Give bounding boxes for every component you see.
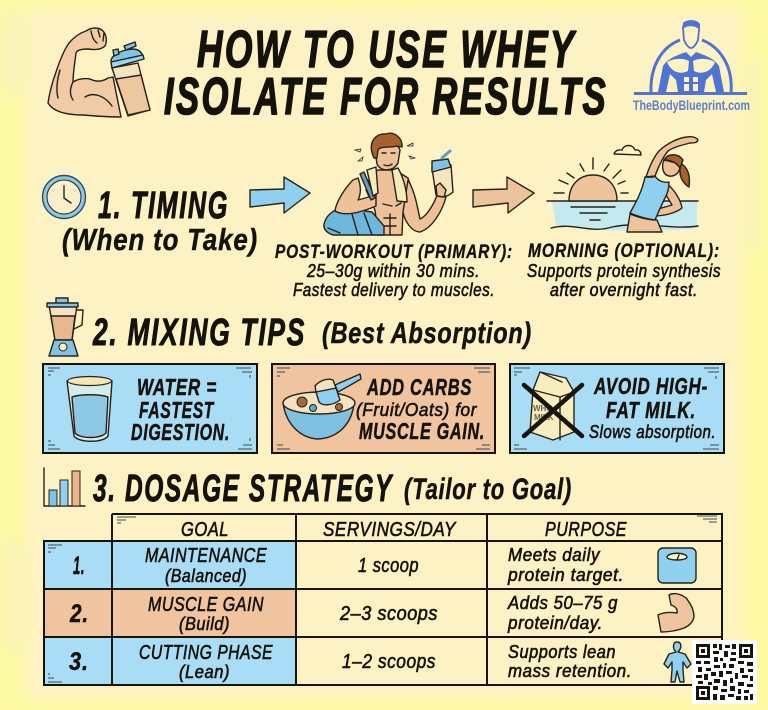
text block: post-workout — [275, 242, 513, 300]
row 3: cutting phase: (Lean) — [179, 662, 230, 682]
icon: bar chart — [44, 468, 85, 506]
panel: add carbs: (Fruit/Oats) for — [356, 400, 477, 420]
title: HOW TO USE WHEY — [197, 21, 577, 79]
icon: clock — [42, 176, 86, 218]
panel: add carbs: MUSCLE GAIN. — [359, 418, 485, 444]
QR code — [692, 640, 757, 704]
panel: water: WATER = — [137, 374, 217, 400]
title — [164, 21, 608, 126]
section 2 heading: mixing tips: (Best Absorption) — [322, 317, 532, 350]
dosage table — [44, 514, 722, 685]
text block: post-workout: 25–30g within 30 mins. — [306, 261, 480, 281]
row 2: muscle gain: Adds 50–75 g — [507, 593, 618, 613]
text block: morning: Supports protein synthesis — [527, 261, 721, 281]
row 3: cutting phase: 1–2 scoops — [342, 651, 436, 673]
row 2: muscle gain: 2–3 scoops — [339, 603, 438, 625]
panel: avoid milk: FAT MILK. — [606, 397, 696, 423]
text block: post-workout: Fastest delivery to muscles. — [293, 280, 495, 300]
table header: SERVINGS/DAY — [323, 519, 457, 541]
row 2: muscle gain: protein/day. — [507, 613, 603, 633]
row 1: maintenance: Meets daily — [508, 545, 600, 565]
text block: post-workout: POST-WORKOUT (PRIMARY): — [275, 242, 513, 263]
table header: GOAL — [181, 519, 229, 541]
arrow: blue — [250, 177, 310, 213]
icon: oats bowl with scoop — [283, 374, 361, 439]
section 1 heading: timing: (When to Take) — [62, 222, 258, 257]
panel: avoid milk: Slows absorption. — [589, 422, 716, 442]
row 1: maintenance: (Balanced) — [165, 566, 247, 586]
panel: water — [43, 364, 257, 453]
row 3: cutting phase: mass retention. — [508, 661, 632, 681]
icon: crossed-out milk carton — [524, 372, 582, 440]
row 2: muscle gain: (Build) — [179, 614, 230, 634]
icon: flexed bicep — [48, 28, 121, 117]
section 3 heading: dosage strategy: 3. DOSAGE STRATEGY — [93, 468, 394, 510]
table header: PURPOSE — [545, 519, 627, 541]
row 3: cutting phase: CUTTING PHASE — [139, 642, 273, 664]
illustration: post-workout man — [324, 133, 453, 235]
row 1: maintenance: 1. — [73, 552, 85, 580]
row 1: maintenance: protein target. — [507, 565, 624, 585]
row 2: muscle gain: 2. — [69, 600, 89, 628]
section 1 heading: timing: 1. TIMING — [98, 185, 229, 227]
text block: morning: MORNING (OPTIONAL): — [528, 241, 720, 262]
icon: crossed-out milk carton: WHO — [533, 404, 553, 413]
panel: water: DIGESTION. — [131, 419, 230, 445]
icon: scale — [658, 548, 696, 583]
section 2 heading: mixing tips — [47, 298, 532, 356]
panel: add carbs: ADD CARBS — [366, 374, 472, 400]
icon: small bicep — [658, 594, 694, 632]
icon: crossed-out milk carton: MILK — [534, 413, 554, 422]
row 1: maintenance: 1 scoop — [358, 555, 419, 577]
table header — [181, 519, 627, 541]
panel: water: FASTEST — [139, 397, 215, 423]
row 1: maintenance: MAINTENANCE — [145, 545, 267, 567]
row 2: muscle gain: MUSCLE GAIN — [148, 594, 264, 616]
text block: morning: after overnight fast. — [550, 280, 698, 300]
row 3: cutting phase: Supports lean — [508, 642, 616, 662]
row 1: maintenance — [73, 545, 696, 586]
text block: morning — [527, 241, 721, 300]
panel: avoid milk: AVOID HIGH- — [593, 373, 708, 399]
row 2: muscle gain — [69, 593, 694, 634]
section 3 heading: dosage strategy: (Tailor to Goal) — [404, 473, 572, 506]
table cell fills — [44, 541, 296, 685]
section 1 heading: timing — [42, 176, 258, 257]
icon: blender — [47, 298, 83, 356]
icon: glass of water — [67, 376, 112, 441]
logo: The Body Blueprint — [633, 20, 750, 113]
icon: protein shaker — [111, 42, 150, 116]
row 3: cutting phase: 3. — [69, 648, 89, 676]
panel: add carbs — [272, 364, 495, 453]
section 2 heading: mixing tips: 2. MIXING TIPS — [92, 312, 306, 354]
panel: avoid milk — [510, 364, 724, 453]
icon: lean person — [664, 642, 691, 682]
row 3: cutting phase — [69, 642, 691, 682]
illustration: morning sunrise and stretch — [547, 137, 698, 232]
arrow: peach — [473, 177, 534, 213]
